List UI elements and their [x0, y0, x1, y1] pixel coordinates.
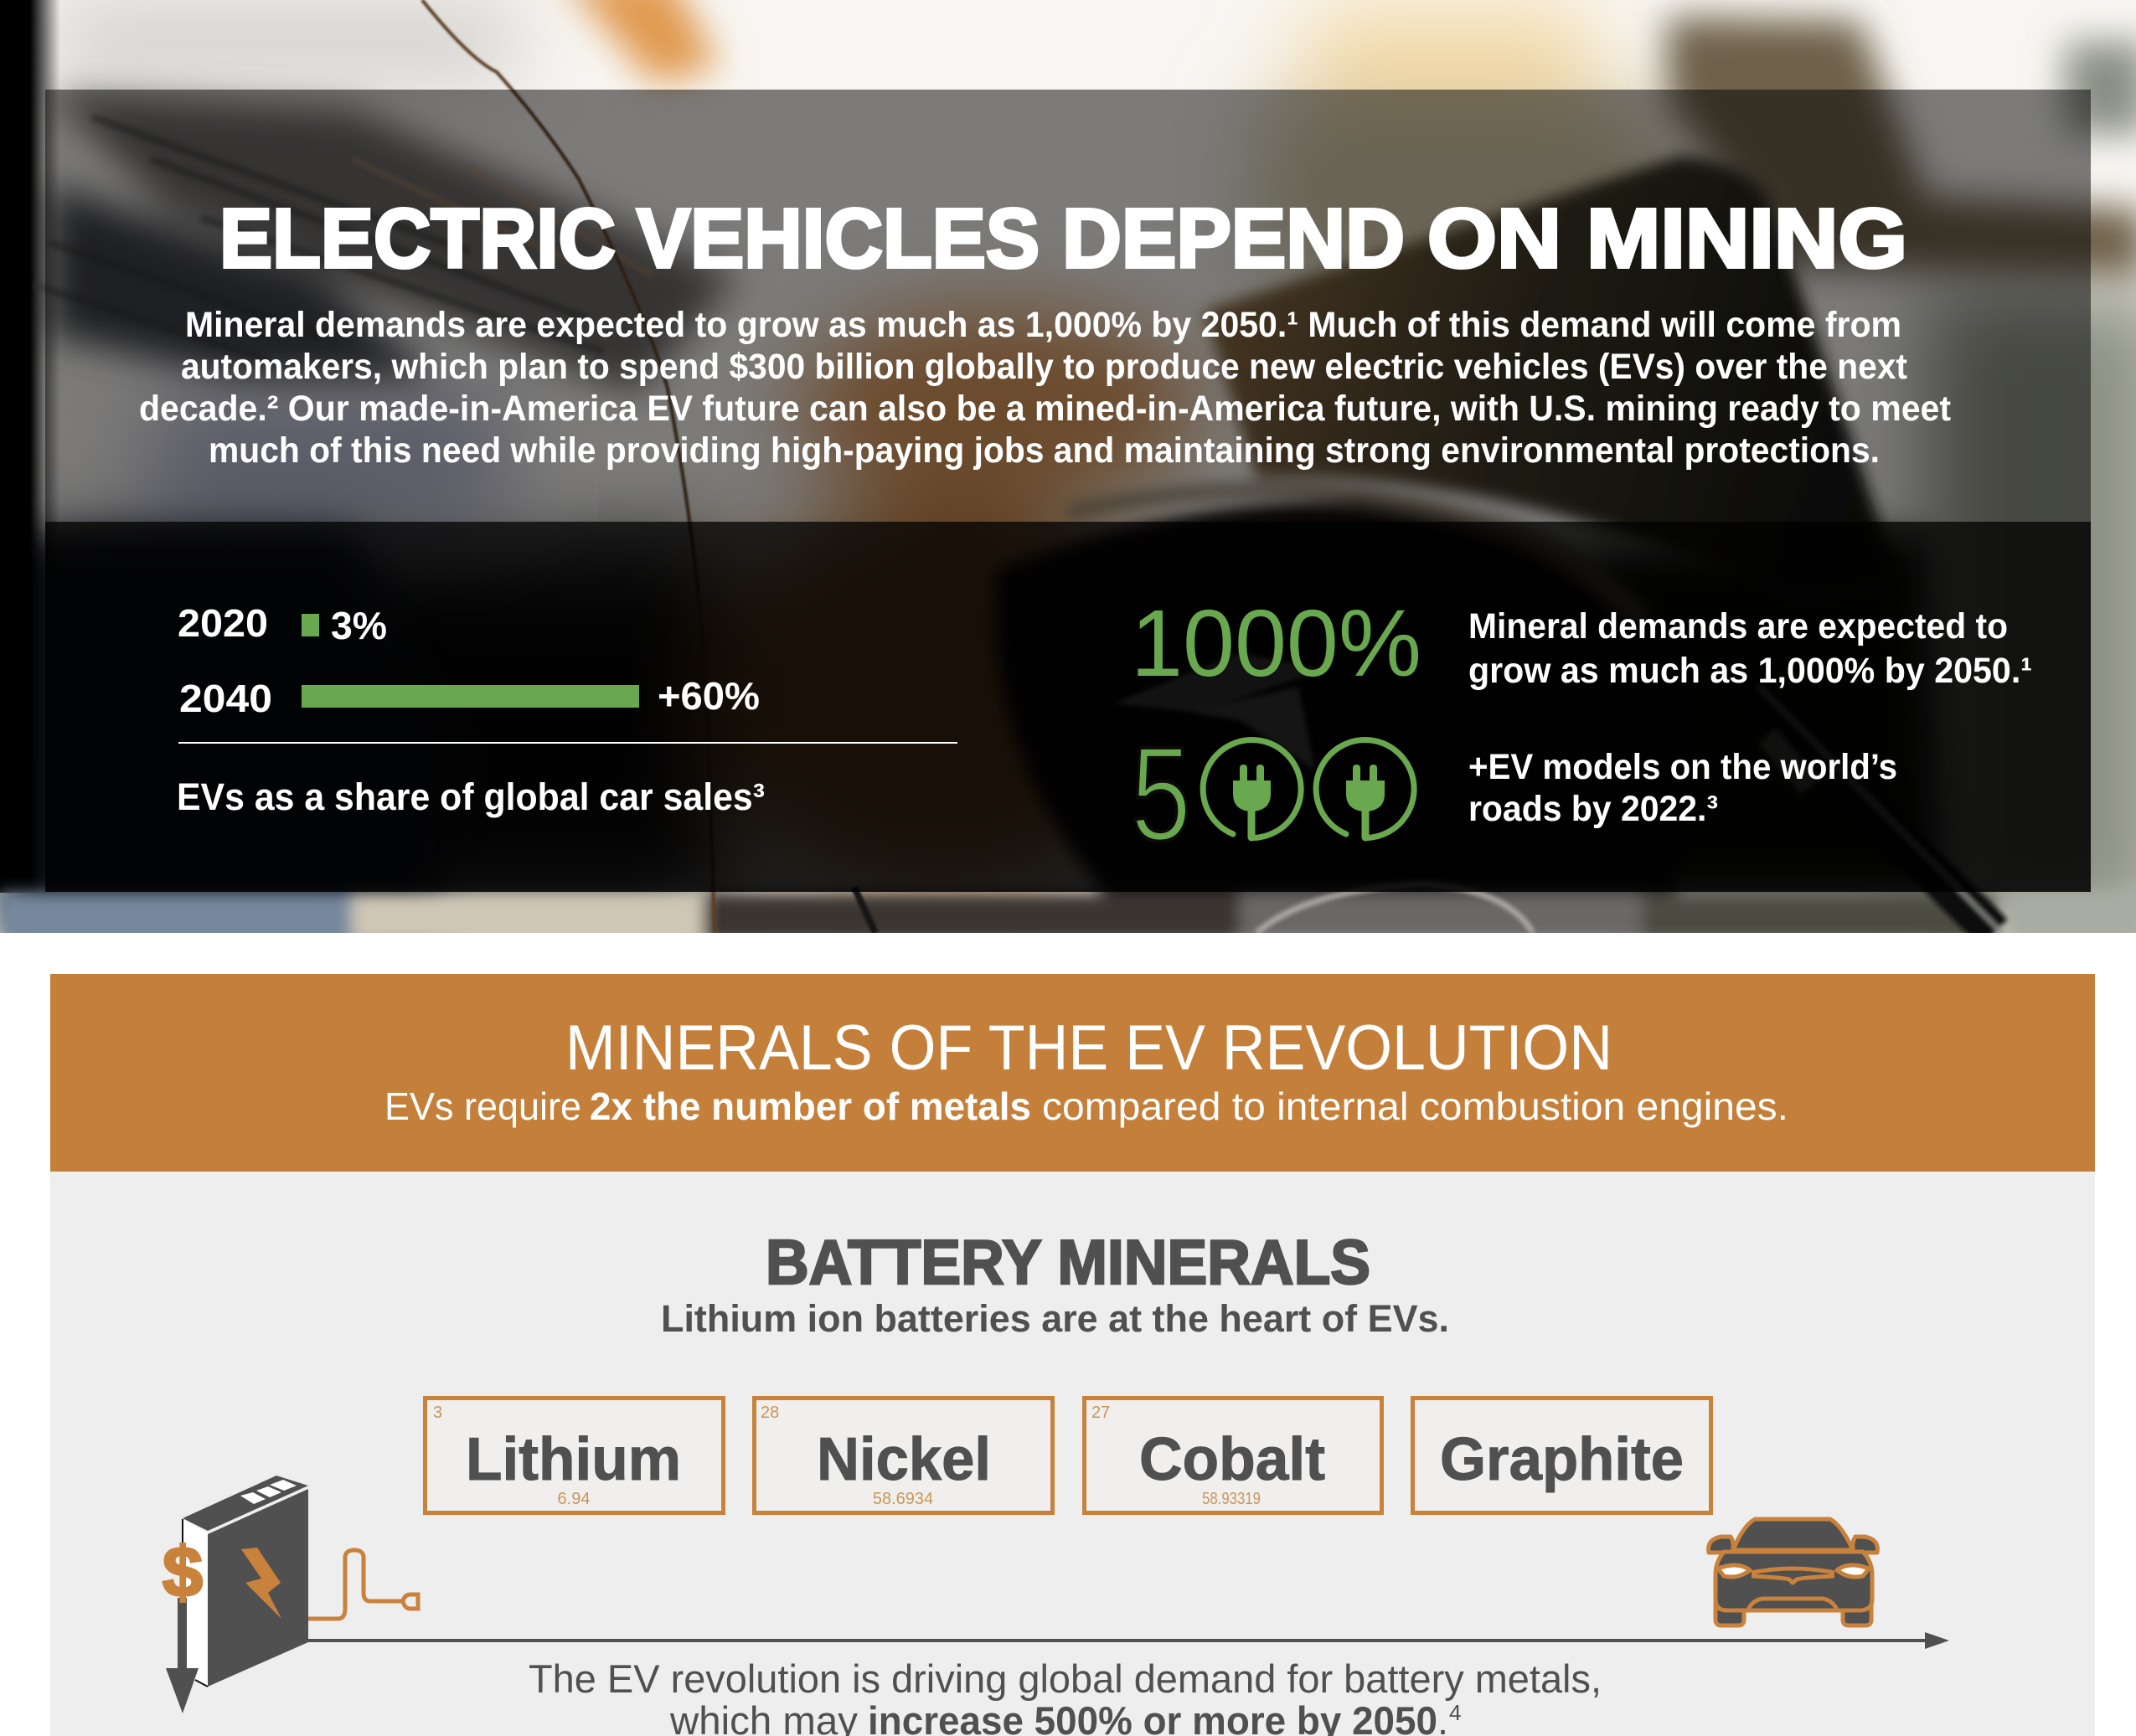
- panel: battery minerals: [50, 1172, 2095, 1736]
- intro paragraph: much of this need while providing high-paying jobs and maintaining strong environmental protections.: [209, 430, 1880, 471]
- bar value: +60%: +60%: [658, 674, 760, 718]
- bar label: 2020: 2020: [178, 601, 268, 645]
- element tile: Lithium: 6.94: [558, 1490, 590, 1508]
- bar: 2020: [302, 614, 319, 636]
- element tile: Lithium: 3: [433, 1404, 442, 1422]
- icon: plug zero 2: [1316, 740, 1414, 837]
- element tile: Nickel: 58.6934: [873, 1490, 933, 1508]
- arrow: timeline axis: [308, 1632, 1949, 1649]
- intro paragraph: [139, 305, 1951, 471]
- panel: hero intro overlay: [45, 90, 2091, 522]
- banner subheading: compared to internal combustion engines.: [1042, 1084, 1788, 1128]
- element tile: Graphite: [1412, 1399, 1710, 1512]
- title: [219, 192, 1907, 286]
- bar chart: EVs as a share of global car sales: [177, 601, 957, 818]
- banner heading: MINERALS OF THE EV REVOLUTION: [565, 1012, 1612, 1084]
- stat: 500 with plug icons as zeros: [1131, 719, 1414, 868]
- stat text: EV models: +EV models on the world’s: [1468, 747, 1897, 787]
- icon: dollar down arrow: [163, 1533, 203, 1713]
- element tile: Cobalt: 27: [1091, 1404, 1110, 1422]
- bar value: 3%: 3%: [331, 604, 387, 647]
- element tile: Lithium: Lithium: [466, 1426, 681, 1493]
- icon: battery cable: [308, 1550, 418, 1619]
- panel: hero stats overlay: [45, 522, 2091, 892]
- stat text: EV models: roads by 2022.³: [1468, 789, 1718, 829]
- bar: 2040: [302, 685, 639, 708]
- stat text: EV models: [1468, 747, 1897, 829]
- element tile: Cobalt: [1084, 1399, 1382, 1512]
- icon: battery: [183, 1476, 308, 1687]
- icon: dollar down arrow: $: [163, 1533, 203, 1611]
- icon: electric car: [1709, 1519, 1877, 1625]
- subheading: lithium ion batteries: Lithium ion batteries are at the heart of EVs.: [661, 1297, 1449, 1340]
- title: VEHICLES: [637, 192, 1040, 286]
- intro paragraph: Mineral demands are expected to grow as much as 1,000% by 2050.¹ Much of this demand will come from: [185, 305, 1901, 345]
- chart caption: EVs as a share of global car sales³: [177, 775, 765, 818]
- stat text: mineral demands: Mineral demands are expected to: [1468, 606, 2008, 646]
- element tile: Cobalt: 58.93319: [1202, 1490, 1261, 1508]
- banner subheading: 2x the number of metals: [590, 1084, 1031, 1128]
- element tile: Nickel: 28: [761, 1404, 779, 1422]
- closing statement: 4: [1449, 1700, 1461, 1725]
- panel: minerals banner: [50, 974, 2095, 1172]
- stat text: mineral demands: grow as much as 1,000% by 2050.¹: [1468, 651, 2032, 691]
- intro paragraph: automakers, which plan to spend $300 billion globally to produce new electric vehicles (EVs) over the next: [181, 347, 1907, 387]
- element tile: Graphite: Graphite: [1440, 1426, 1684, 1493]
- hero photo: EV charging plug: [0, 0, 2136, 943]
- banner subheading: [384, 1084, 1788, 1128]
- intro paragraph: decade.² Our made-in-America EV future can also be a mined-in-America future, with U.S. mining ready to meet: [139, 389, 1951, 429]
- icon: plug zero 1: [1203, 740, 1301, 837]
- stat text: mineral demands: [1468, 606, 2032, 691]
- title: ON: [1427, 192, 1561, 286]
- stat: 500 with plug icons as zeros: 5: [1131, 719, 1191, 868]
- heading: battery minerals: BATTERY MINERALS: [766, 1227, 1370, 1297]
- left black edge: [0, 0, 60, 893]
- banner subheading: EVs require: [384, 1084, 581, 1128]
- closing statement: The EV revolution is driving global demand for battery metals,: [529, 1656, 1602, 1701]
- element tile: Lithium: [426, 1399, 724, 1512]
- icon: lightning bolt: [241, 1548, 281, 1619]
- title: MINING: [1587, 192, 1907, 286]
- title: DEPEND: [1062, 192, 1405, 286]
- element tile: Nickel: [754, 1399, 1052, 1512]
- bar label: 2040: 2040: [179, 677, 272, 720]
- title: ELECTRIC: [219, 192, 616, 286]
- closing statement: [529, 1656, 1602, 1736]
- element tile: Nickel: Nickel: [817, 1426, 991, 1493]
- element tile: Cobalt: Cobalt: [1139, 1426, 1325, 1493]
- stat: 1000%: 1000%: [1131, 590, 1421, 696]
